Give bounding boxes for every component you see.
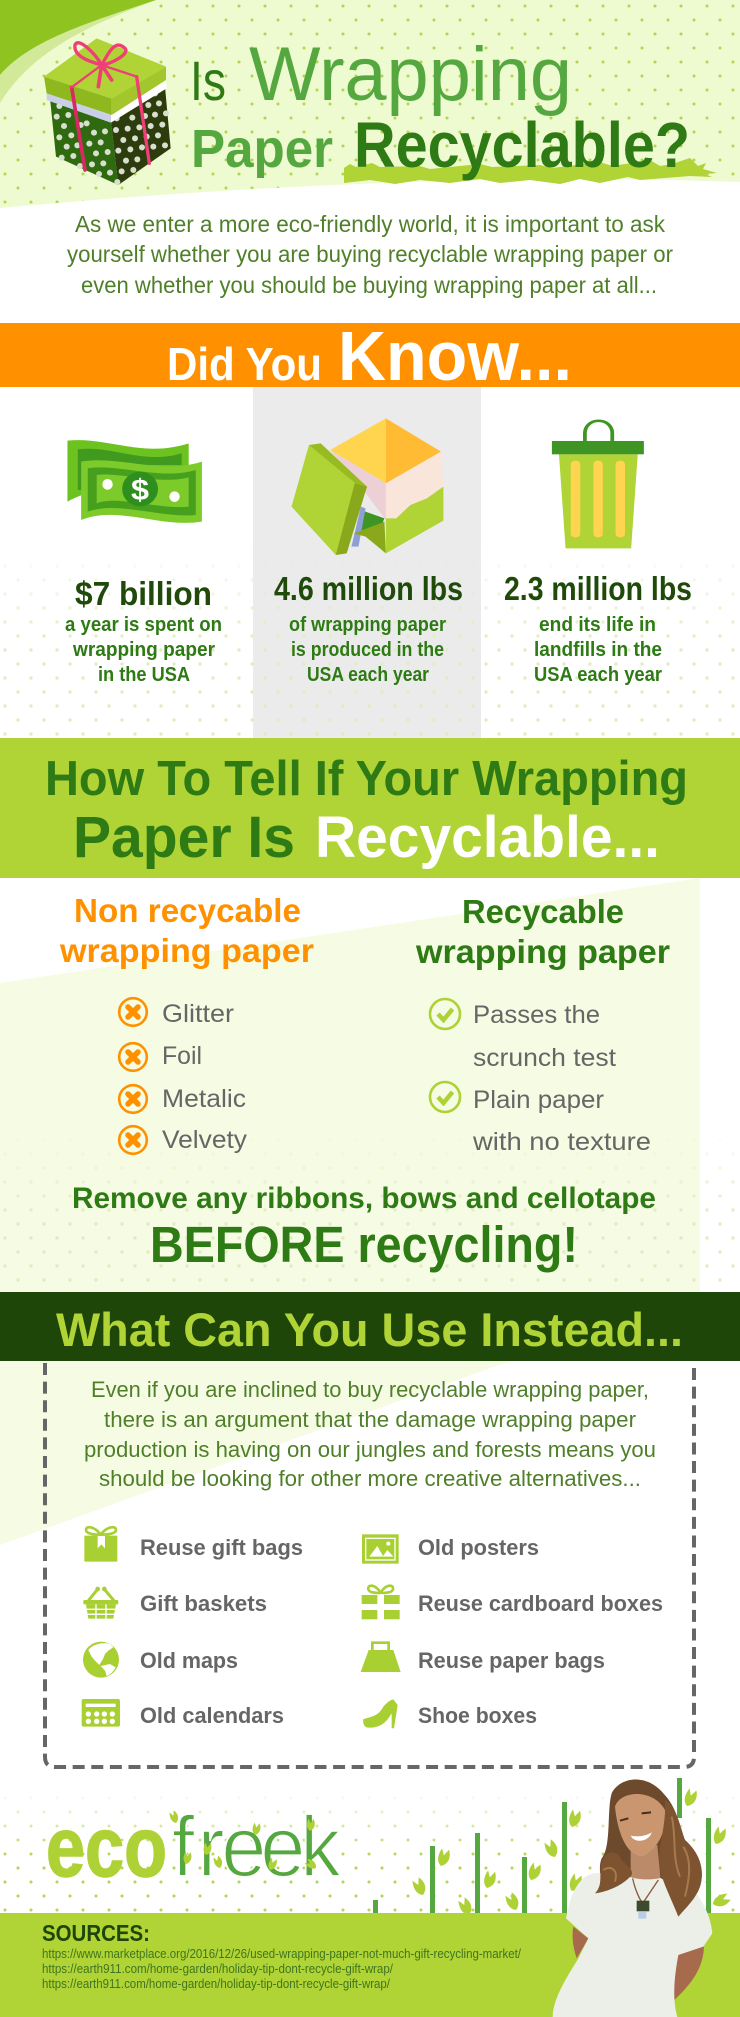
intro text: yourself whether you are buying recyclable wrapping paper or [67, 241, 673, 267]
icon: calendar [82, 1699, 120, 1727]
list: recyclable items: scrunch test [473, 1044, 616, 1072]
alternatives intro text: there is an argument that the damage wrapping paper [104, 1407, 636, 1432]
column heading: recyclable: Recycable [462, 893, 624, 930]
banner: what can you use instead [0, 1292, 740, 1361]
alternatives intro text: Even if you are inclined to buy recyclable wrapping paper, [91, 1377, 649, 1402]
column heading: non recyclable: Non recycable [74, 892, 301, 929]
list: non recyclable items: Glitter [162, 1000, 234, 1028]
alternatives list: Old calendars [140, 1703, 284, 1728]
stat: 7 billion: in the USA [98, 664, 190, 686]
stat: 4.6 million lbs: is produced in the [291, 639, 444, 661]
stat: 7 billion: wrapping paper [72, 639, 215, 661]
stat: 7 billion [65, 575, 222, 686]
banner: did you know: Know... [338, 317, 572, 395]
icon: gift [362, 1586, 400, 1619]
column heading: recyclable: wrapping paper [415, 933, 670, 970]
panel: recyclable comparison [0, 878, 740, 1292]
sources: https://earth911.com/home-garden/holiday-tip-dont-recycle-gift-wrap/ [42, 1976, 390, 1991]
stat: 4.6 million lbs: USA each year [307, 664, 429, 686]
alternatives list: Reuse paper bags [418, 1648, 605, 1673]
intro text: As we enter a more eco-friendly world, it is important to ask [75, 211, 665, 237]
sources: https://www.marketplace.org/2016/12/26/used-wrapping-paper-not-much-gift-recycling-market/ [42, 1946, 521, 1961]
alternatives icons: right column [361, 1534, 401, 1728]
stat: 4.6 million lbs: 4.6 million lbs [274, 570, 463, 607]
sources [42, 1920, 521, 1991]
stat: 4.6 million lbs [274, 570, 463, 686]
panel: alternatives [0, 1361, 694, 1767]
icon: gift bag [84, 1527, 117, 1562]
alternatives intro text: should be looking for other more creative alternatives... [99, 1466, 641, 1491]
panel: did you know facts [0, 387, 740, 738]
callout: remove ribbons: BEFORE recycling! [150, 1216, 578, 1273]
banner: how to tell: Recyclable... [315, 805, 660, 870]
icon: shoe [363, 1699, 398, 1728]
icon: globe [83, 1642, 119, 1678]
list: non recyclable items: Foil [162, 1042, 202, 1070]
logo: ecofreek [46, 1799, 341, 1894]
title: Is [190, 49, 226, 112]
alternatives list: Old maps [140, 1648, 238, 1673]
title: Recyclable? [354, 109, 690, 181]
alternatives intro text: production is having on our jungles and forests means you [84, 1437, 656, 1462]
banner: did you know: Did You [167, 338, 322, 390]
intro text: even whether you should be buying wrapping paper at all... [81, 272, 657, 298]
list: non recyclable items [119, 998, 248, 1154]
column heading: recyclable [415, 893, 670, 970]
stat: 4.6 million lbs: of wrapping paper [289, 614, 446, 636]
sources: SOURCES: [42, 1920, 150, 1946]
stat: 2.3 million lbs: 2.3 million lbs [504, 570, 692, 607]
banner: how to tell: How To Tell If Your Wrapping [45, 752, 688, 806]
stat: 2.3 million lbs: landfills in the [534, 639, 662, 661]
alternatives list: Reuse cardboard boxes [418, 1591, 663, 1616]
icon: basket [83, 1587, 118, 1619]
list: non recyclable items: Velvety [162, 1126, 248, 1154]
title: Paper [191, 119, 333, 179]
alternatives list [140, 1535, 663, 1728]
icon: poster [362, 1534, 399, 1564]
logo: ecofreek: freek [172, 1799, 341, 1894]
person [553, 1780, 712, 2017]
callout: remove ribbons: Remove any ribbons, bows and cellotape [72, 1182, 656, 1215]
banner: what can you use instead: What Can You Use Instead... [56, 1303, 683, 1356]
sources: https://earth911.com/home-garden/holiday-tip-dont-recycle-gift-wrap/ [42, 1961, 393, 1976]
stat: 2.3 million lbs: end its life in [539, 614, 656, 636]
title [190, 32, 717, 184]
intro text [67, 211, 673, 298]
title underline: grass brush [344, 158, 717, 184]
list: recyclable items: Passes the [473, 1001, 600, 1029]
bamboo stems [373, 1778, 732, 1917]
list: recyclable items [430, 999, 651, 1156]
stat: 7 billion: $7 billion [75, 575, 212, 612]
alternatives list: Gift baskets [140, 1591, 267, 1616]
stat: 7 billion: a year is spent on [65, 614, 222, 636]
alternatives list: Reuse gift bags [140, 1535, 303, 1560]
column heading: non recyclable [59, 892, 314, 969]
icon: money [67, 440, 202, 523]
alternatives icons: left column [82, 1527, 120, 1727]
footer band [0, 1913, 740, 2017]
alternatives list: Shoe boxes [418, 1703, 537, 1728]
alternatives list: Old posters [418, 1535, 539, 1560]
header background [0, 0, 740, 210]
banner: did you know [0, 317, 740, 395]
stat: 2.3 million lbs [504, 570, 692, 686]
list: non recyclable items: Metalic [162, 1085, 246, 1113]
footer background dots [0, 1790, 740, 1913]
column heading: non recyclable: wrapping paper [59, 932, 314, 969]
list: recyclable items: with no texture [472, 1128, 651, 1156]
stat: 2.3 million lbs: USA each year [534, 664, 662, 686]
icon: paper bag [361, 1643, 401, 1672]
icon: gift box [44, 38, 171, 185]
panel: did you know facts: $ [131, 474, 149, 507]
logo: ecofreek: eco [46, 1800, 167, 1894]
icon: open gift box [292, 418, 443, 555]
callout: remove ribbons [72, 1182, 656, 1273]
list: recyclable items: Plain paper [473, 1086, 604, 1114]
banner: how to tell: Paper Is [73, 805, 295, 870]
banner: how to tell [0, 738, 740, 878]
title: Wrapping [249, 32, 572, 117]
icon: trash can [552, 421, 644, 548]
alternatives intro text [84, 1377, 656, 1491]
